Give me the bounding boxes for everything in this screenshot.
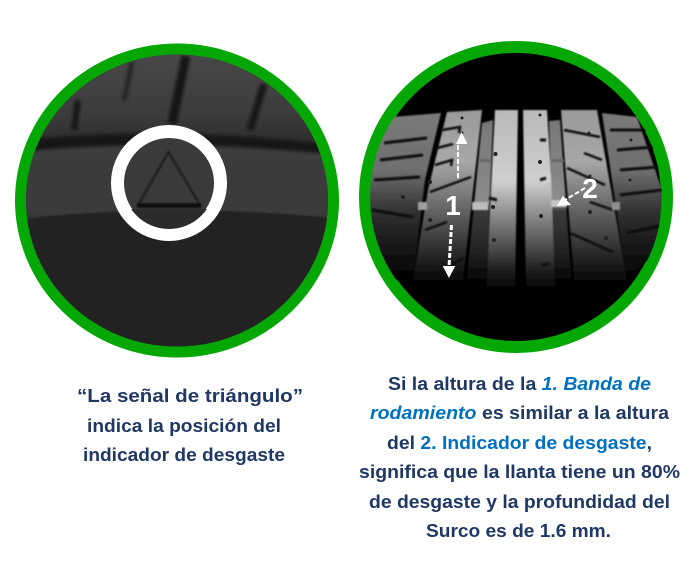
green ring: right	[365, 47, 667, 347]
tyre sidewall photo	[26, 54, 328, 346]
text block: left caption: indica la posición del	[87, 416, 281, 436]
text block: left caption: indicador de desgaste	[83, 445, 285, 465]
arrow: tread band measure up	[456, 132, 468, 178]
text block: right caption: del 2. Indicador de desgaste ,	[387, 433, 652, 453]
arrow: tread band measure down	[443, 225, 455, 278]
label: 2: 2	[582, 173, 598, 204]
text block: left caption: “La señal de triángulo”	[77, 386, 303, 406]
panel: triangle signal tyre photo	[15, 44, 339, 360]
text block: right caption	[359, 374, 680, 541]
label: 1: 1	[445, 190, 461, 221]
text block: left caption	[77, 386, 303, 465]
text block: right caption: Surco es de 1.6 mm.	[426, 521, 611, 541]
text block: right caption: de desgaste y la profundidad del	[369, 492, 670, 512]
arrow: wear indicator	[557, 188, 585, 206]
panel: tread wear photo	[365, 47, 667, 347]
tread indicator bars	[418, 140, 620, 265]
callout: white ring around triangle	[118, 132, 220, 239]
text block: right caption: significa que la llanta tiene un 80%	[359, 462, 680, 482]
tread grooves and sipes	[372, 127, 662, 277]
tread holes	[401, 114, 632, 242]
text block: right caption: rodamiento es similar a la altura	[370, 403, 670, 423]
green ring: left	[21, 50, 333, 352]
icon: triangle mark	[137, 152, 201, 206]
text block: right caption: Si la altura de la 1. Banda de	[388, 374, 651, 394]
tyre tread photo	[370, 110, 662, 290]
